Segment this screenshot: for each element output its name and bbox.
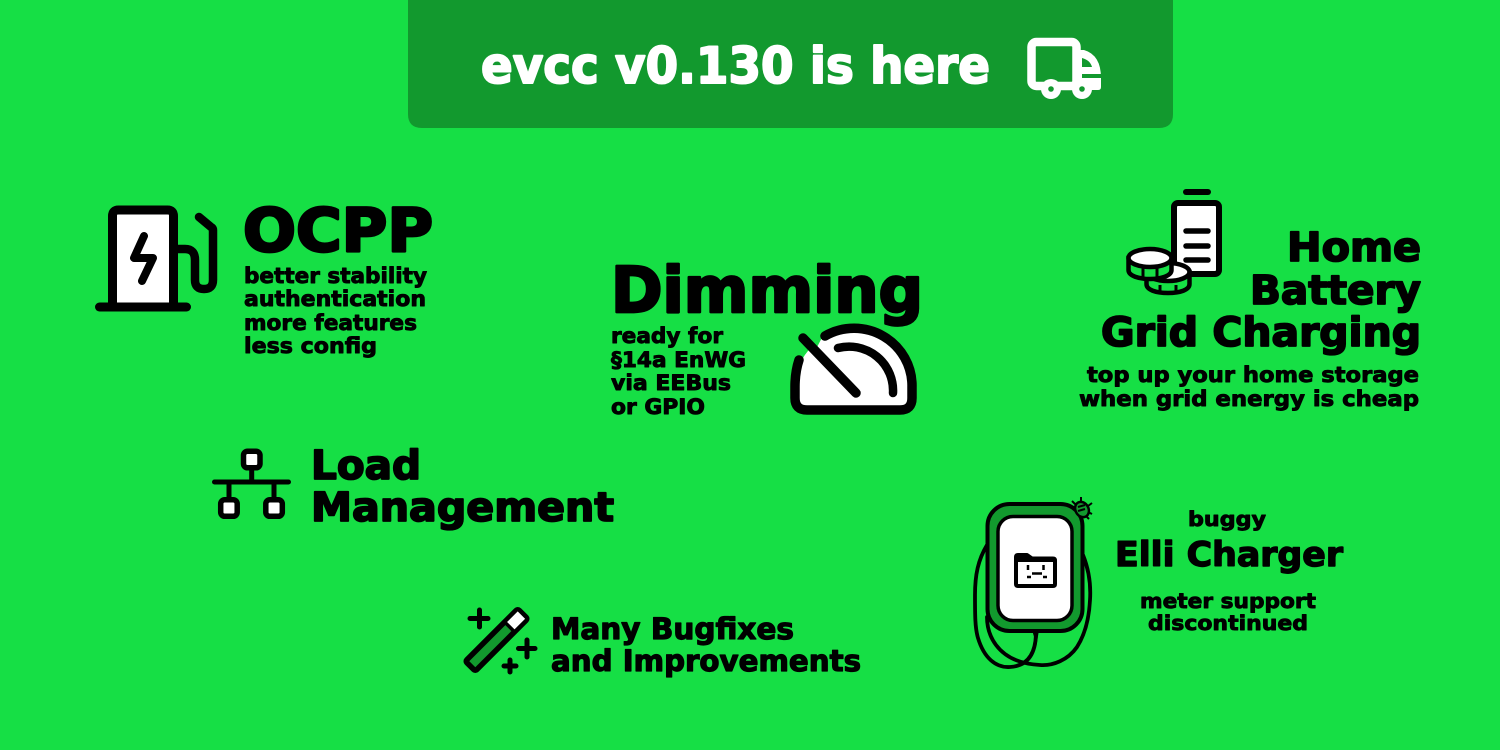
Home Battery Grid Charging heading: Grid Charging [1101, 310, 1421, 356]
panel: Load Management [214, 443, 614, 531]
Home Battery Grid Charging heading [1101, 225, 1421, 356]
Load Management heading: Load [311, 443, 421, 489]
OCPP feature list: better stability [244, 264, 427, 288]
Home Battery Grid Charging heading: Battery [1250, 268, 1421, 314]
icon: battery with coins [1128, 192, 1219, 293]
Home battery description: top up your home storage [1087, 363, 1419, 387]
panel: Home Battery Grid Charging [1079, 192, 1421, 411]
header banner [408, 0, 1173, 128]
icon: dimmed gauge [790, 328, 912, 410]
icon: broken wallbox charger [975, 497, 1092, 667]
Elli Charger note: meter support [1140, 589, 1316, 613]
icon: magic wand [465, 609, 528, 671]
Elli Charger note: discontinued [1148, 611, 1308, 635]
Dimming details: or GPIO [611, 395, 705, 419]
header title: evcc v0.130 is here [481, 37, 990, 95]
icon: sparkles [470, 610, 535, 672]
Home Battery Grid Charging heading: Home [1287, 225, 1421, 271]
OCPP heading: OCPP [243, 196, 433, 266]
icon: network topology [214, 451, 288, 516]
Load Management heading: Management [311, 485, 614, 531]
panel: Elli Charger [975, 497, 1343, 667]
icon: bug [1072, 497, 1092, 520]
Load Management heading [311, 443, 614, 531]
OCPP feature list: authentication [244, 287, 426, 311]
Home battery description: when grid energy is cheap [1079, 387, 1419, 411]
Dimming details: §14a EnWG [611, 348, 746, 372]
Bugfixes heading: and Improvements [551, 644, 861, 678]
Elli Charger heading: Elli Charger [1115, 535, 1343, 575]
Dimming details [611, 324, 746, 419]
OCPP feature list [244, 264, 427, 358]
Elli Charger note [1140, 589, 1316, 635]
panel: OCPP [100, 196, 433, 358]
icon: delivery truck [1032, 42, 1101, 99]
panel: Dimming [611, 254, 923, 419]
Dimming details: via EEBus [611, 371, 731, 395]
Bugfixes heading: Many Bugfixes [551, 612, 794, 646]
Dimming heading: Dimming [611, 254, 923, 327]
Bugfixes heading [551, 612, 861, 678]
panel: Bugfixes [465, 609, 861, 678]
OCPP feature list: more features [244, 311, 417, 335]
Dimming details: ready for [611, 324, 724, 348]
OCPP feature list: less config [244, 334, 377, 358]
buggy label: buggy [1188, 507, 1266, 531]
Home battery description [1079, 363, 1419, 411]
icon: charging pump [100, 210, 213, 307]
